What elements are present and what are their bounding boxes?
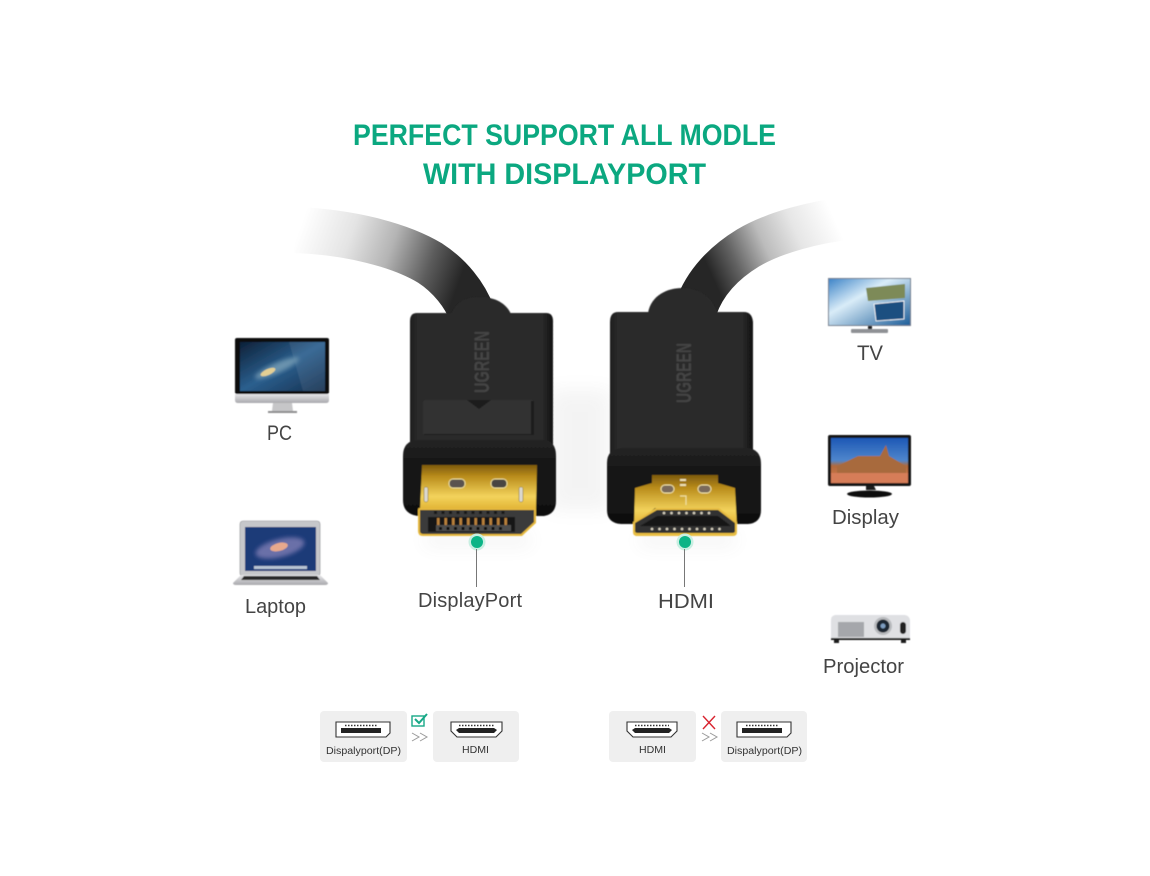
icon: TV [828,278,911,333]
arrow: double chevron [702,733,717,741]
card: HDMI source [609,711,696,762]
cable: DisplayPort side [295,230,472,314]
contact holes [661,479,711,505]
icon: Display [828,435,911,498]
icon: Laptop [233,521,328,585]
icon: red cross [703,716,715,729]
latch button [423,400,534,435]
label: PC: PC [267,422,292,445]
title [353,119,776,191]
compatibility: HDMI to DP not supported [609,711,807,762]
front face [633,508,737,536]
plug collar [403,440,556,516]
arrow: double chevron [412,733,427,741]
connector shadows [425,390,735,546]
icon: PC [235,338,329,413]
plug collar [607,448,761,524]
card: Displayport source: Dispalyport(DP) [326,746,401,757]
label: Display: Display [832,507,899,529]
gold shell [420,465,537,510]
card: Displayport target: Dispalyport(DP) [727,746,802,757]
callout: HDMI [658,534,714,613]
strain relief [648,288,717,313]
label: Projector: Projector [823,656,904,678]
title: WITH DISPLAYPORT [423,158,706,191]
cable: HDMI side [696,218,850,308]
pins [651,512,721,530]
label: TV: TV [857,342,883,365]
callout: DisplayPort [418,534,522,612]
connector slot [428,517,515,532]
connector slot [640,516,731,526]
strain relief [451,297,511,316]
title: PERFECT SUPPORT ALL MODLE [353,119,776,152]
compatibility: DP to HDMI supported [320,711,519,762]
card: HDMI source: HDMI [639,745,666,756]
card: HDMI target [433,711,519,762]
callout: DisplayPort: DisplayPort [418,590,522,612]
icon: green check [412,714,427,726]
pins [434,511,504,514]
DisplayPort plug [403,297,556,536]
card: HDMI target: HDMI [462,745,489,756]
callout: HDMI: HDMI [658,591,714,613]
plug body [610,312,753,455]
plug body [410,313,553,445]
card: Displayport target [721,711,807,762]
HDMI plug [607,288,761,536]
card: Displayport source [320,711,407,762]
UGREEN logo: UGREEN [673,343,696,403]
label: Laptop: Laptop [245,596,306,618]
icon: Projector [831,615,910,643]
front face [418,508,536,536]
gold shell [634,475,737,526]
UGREEN logo: UGREEN [471,331,494,393]
contact holes [424,479,523,502]
